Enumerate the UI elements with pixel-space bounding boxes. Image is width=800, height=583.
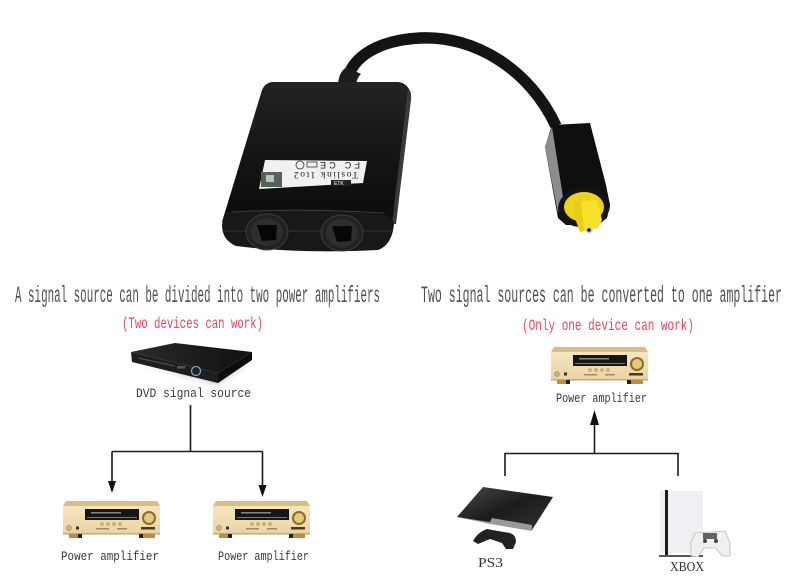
label sticker: FC CE bbox=[320, 160, 360, 170]
arrows: DVD to two amplifiers bbox=[108, 405, 266, 497]
icon: white console and controller bbox=[659, 490, 730, 557]
label: amplifier middle: Power amplifier bbox=[218, 549, 309, 564]
splitter body bbox=[222, 82, 411, 222]
label sticker: Toslink 1to2 bbox=[294, 169, 358, 179]
label: DVD signal source: DVD signal source bbox=[136, 386, 251, 401]
yellow plug tip bbox=[564, 192, 604, 234]
icon: DVD player bbox=[129, 343, 252, 384]
optical port right bbox=[321, 215, 363, 251]
optical port left bbox=[246, 214, 288, 250]
plug housing bbox=[545, 123, 610, 225]
label sticker: ETK bbox=[334, 181, 344, 187]
product: Toslink 1to2 splitter bbox=[222, 38, 613, 251]
cable bbox=[347, 38, 556, 126]
text: A signal source can be divided into two power amplifiers bbox=[15, 283, 380, 309]
label: PS3: PS3 bbox=[478, 556, 503, 571]
plug rim bbox=[555, 184, 613, 230]
icon: amplifier left bbox=[63, 501, 160, 538]
label sticker bbox=[259, 160, 367, 189]
icon: amplifier middle bbox=[213, 501, 310, 538]
note: one device: (Only one device can work) bbox=[522, 317, 694, 335]
label: XBOX: XBOX bbox=[670, 560, 704, 575]
note: two devices: (Two devices can work) bbox=[122, 315, 263, 333]
label: amplifier right: Power amplifier bbox=[556, 391, 647, 406]
icon: amplifier right bbox=[551, 347, 648, 384]
arrows: two sources to one amplifier bbox=[505, 410, 678, 476]
label: amplifier left: Power amplifier bbox=[61, 549, 159, 564]
icon: PS3 console bbox=[457, 487, 553, 549]
